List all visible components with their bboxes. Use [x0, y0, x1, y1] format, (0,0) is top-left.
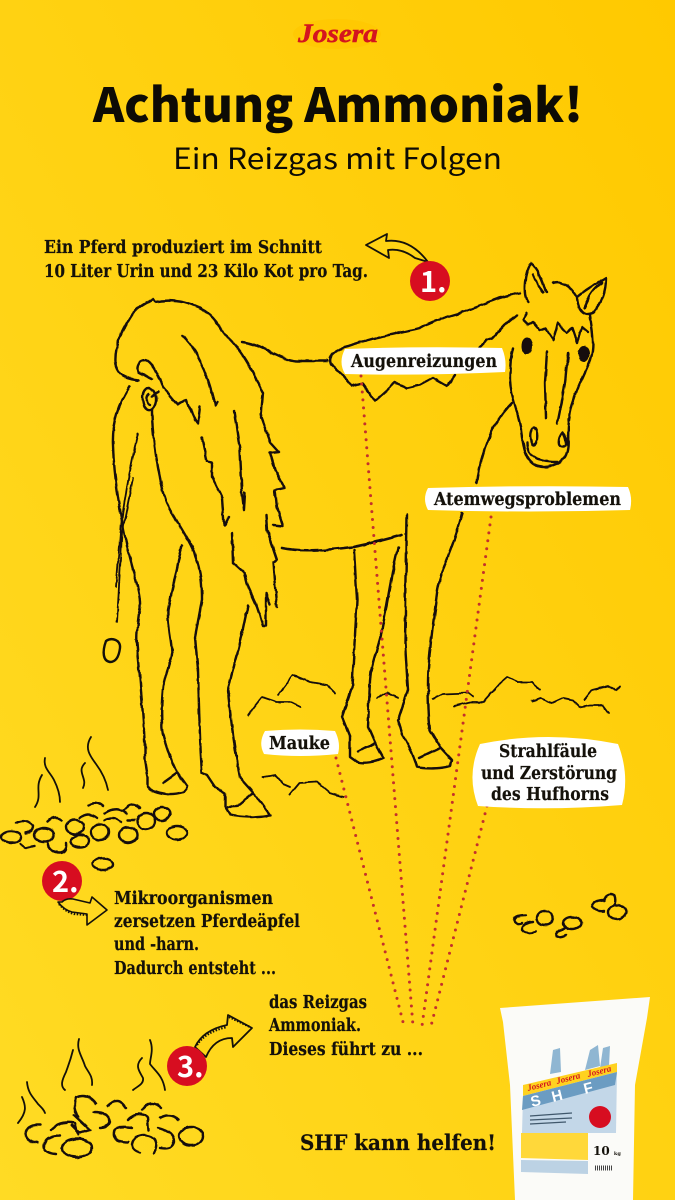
badge 3	[167, 1044, 207, 1086]
bag blue panel	[522, 1072, 617, 1133]
ground tufts	[248, 675, 620, 797]
product bag	[500, 997, 650, 1200]
left ear	[525, 263, 546, 303]
badge 1	[410, 259, 450, 301]
dock swirl	[143, 388, 158, 410]
text: step 3: Ammoniak.	[268, 1016, 361, 1036]
text: step 2: Dadurch entsteht ...	[114, 959, 276, 979]
arrow 2	[58, 897, 107, 925]
bag text lines	[530, 1113, 572, 1124]
bag band letters	[529, 1079, 595, 1111]
bag logos: Josera	[554, 1070, 582, 1086]
label: Augenreizungen	[342, 347, 506, 375]
second front leg	[342, 547, 398, 763]
logo: Josera: Josera	[297, 19, 378, 48]
title: Achtung Ammoniak!	[92, 67, 583, 136]
bag yellow band	[523, 1063, 617, 1096]
bag barcode	[595, 1166, 612, 1170]
rump and tail outline	[115, 299, 284, 526]
text: step 3: Dieses führt zu ...	[269, 1040, 423, 1060]
label: Mauke	[261, 730, 339, 756]
label: Strahlfäule: des Hufhorns	[491, 785, 609, 805]
text: step 2: Mikroorganismen	[114, 889, 273, 909]
text: step 1: Ein Pferd produziert im Schnitt	[44, 238, 322, 258]
right ear and poll	[552, 278, 606, 314]
droppings upper left	[1, 803, 187, 870]
text: step 2: und -harn.	[114, 935, 199, 955]
text: step 1	[44, 238, 368, 282]
droppings bottom left	[25, 1096, 203, 1157]
forelock	[523, 313, 588, 343]
bag band letters: H	[550, 1087, 564, 1106]
call to action: SHF kann helfen!	[300, 1130, 496, 1155]
neck and mane	[330, 293, 520, 401]
label: Strahlfäule	[472, 737, 625, 808]
arrow 3	[195, 1015, 252, 1057]
badge 1: 1.	[420, 259, 447, 301]
text: step 2: zersetzen Pferdeäpfel	[114, 912, 300, 932]
label: Augenreizungen: Augenreizungen	[350, 352, 497, 372]
bag illustration: hooves	[550, 1045, 610, 1074]
tail strands	[137, 336, 277, 625]
arrow 1	[366, 234, 428, 262]
bag logos: Josera	[525, 1077, 553, 1093]
bag dark blue band	[522, 1072, 617, 1110]
chest and front leg	[398, 403, 512, 768]
label: Strahlfäule: und Zerstörung	[481, 764, 617, 784]
steam bottom left	[18, 1039, 165, 1123]
dotted lines	[336, 376, 491, 1026]
badge 3: 3.	[177, 1044, 204, 1086]
text: step 3: das Reizgas	[269, 993, 367, 1013]
bag weight: 10 kg	[593, 1144, 621, 1158]
steam left	[35, 737, 108, 807]
badge 2: 2.	[52, 859, 79, 901]
label: Strahlfäule: Strahlfäule	[499, 742, 597, 762]
bag band letters: F	[582, 1079, 595, 1098]
horse illustration	[113, 263, 606, 817]
bag lower panel	[521, 1160, 588, 1174]
bag band letters: S	[529, 1092, 543, 1111]
text: step 3	[268, 993, 423, 1060]
bag yellow box	[521, 1133, 588, 1160]
text: step 1: 10 Liter Urin und 23 Kilo Kot pro Tag.	[44, 262, 368, 282]
belly	[282, 535, 402, 550]
hind leg left	[113, 386, 187, 794]
label: Atemwegsproblemen: Atemwegsproblemen	[433, 490, 621, 510]
face lines	[545, 352, 568, 423]
head	[510, 315, 593, 467]
subtitle: Ein Reizgas mit Folgen	[173, 136, 502, 178]
nostrils	[530, 427, 566, 447]
back line	[242, 342, 327, 361]
hind leg inner lines	[116, 433, 138, 622]
label: Mauke: Mauke	[269, 734, 330, 754]
bag logos: Josera	[585, 1063, 613, 1079]
bag seal	[589, 1106, 611, 1128]
bag logos	[525, 1063, 613, 1093]
text: step 2	[114, 889, 300, 979]
dropping near hind leg	[104, 639, 120, 662]
hind leg right	[152, 410, 270, 817]
eyes	[522, 338, 590, 362]
droppings right	[514, 895, 626, 937]
badge 2	[42, 859, 82, 901]
